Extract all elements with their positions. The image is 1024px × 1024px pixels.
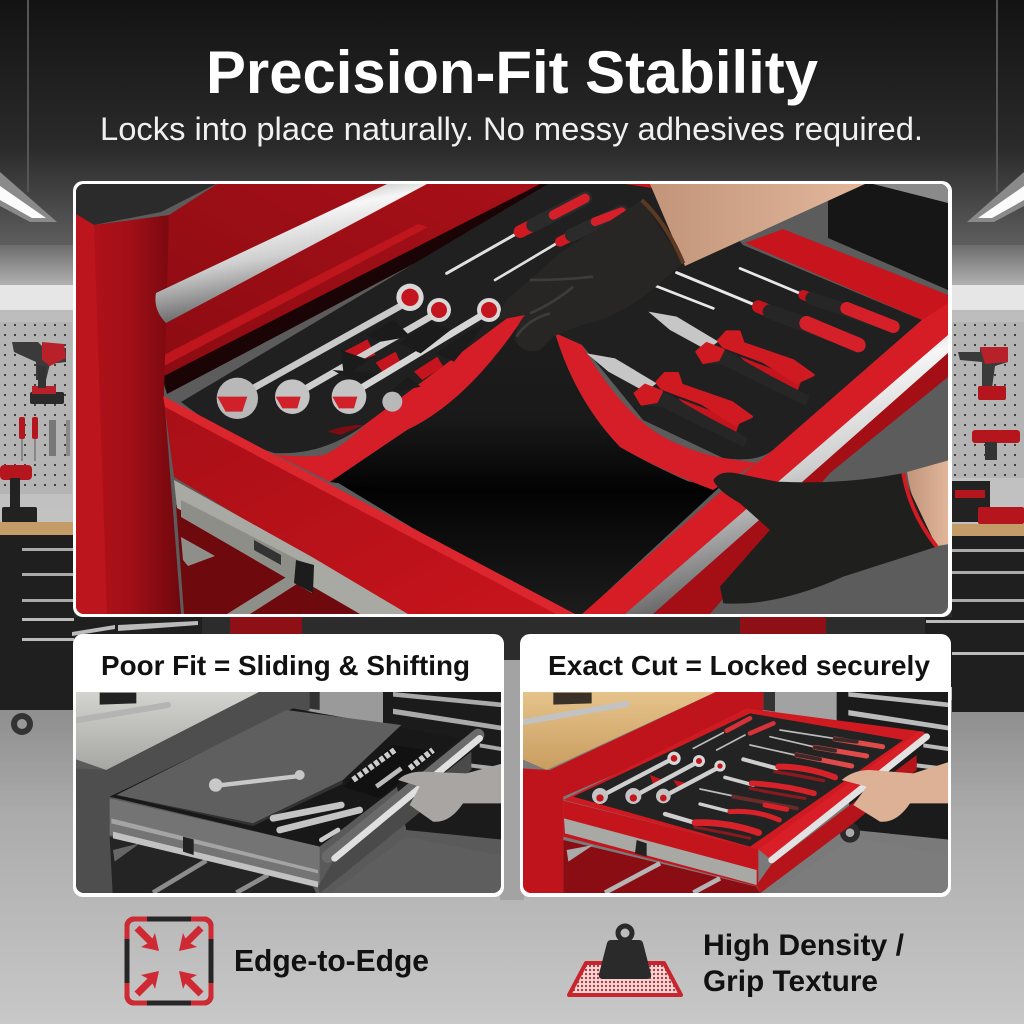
drawer floor: [330, 478, 725, 614]
label: high density grip texture: Grip Texture: [703, 965, 878, 998]
bench top: [520, 690, 720, 770]
screwdrivers by the wrist: [447, 198, 622, 280]
icon: hanging hand tools: [19, 417, 70, 461]
back red rim right: [745, 229, 948, 320]
floor: [767, 837, 953, 900]
loose tools: [273, 805, 360, 830]
drawer slide rail: [174, 480, 408, 614]
drawer rail: [757, 755, 917, 893]
upper forearm: [650, 184, 865, 266]
cabinet post: [76, 214, 181, 614]
ceiling lamp right: [967, 0, 1024, 222]
chrome rail: [625, 335, 948, 614]
drawer front face: [164, 402, 560, 614]
shadow gap under upper drawer: [162, 184, 565, 394]
screwdrivers: [693, 718, 883, 809]
upper drawer highlight: [160, 224, 428, 367]
red foam strap right: [555, 333, 757, 490]
back red rim top: [626, 184, 652, 188]
right screwdrivers: [653, 268, 893, 345]
title: Precision-Fit Stability: [206, 39, 819, 106]
tray rim: [563, 708, 923, 850]
drawer front: [110, 798, 320, 887]
pliers lower: [586, 353, 754, 432]
drawer rail: [318, 752, 471, 893]
bench top: [73, 690, 263, 770]
right workbench cabinet: [925, 524, 1024, 712]
wrenches: [592, 752, 726, 804]
lower forearm: [907, 460, 950, 546]
red foam strap left: [274, 311, 532, 482]
right pegboard with tools: [952, 322, 1024, 524]
black cabinet behind: [383, 690, 506, 840]
lower drawer rails: [181, 537, 300, 614]
pliers: [665, 759, 835, 838]
loose mat: [116, 710, 401, 823]
red rail underside: [653, 353, 948, 614]
hand: [398, 763, 503, 822]
heading: poor fit: Poor Fit = Sliding & Shifting: [101, 650, 470, 681]
label: edge-to-edge: Edge-to-Edge: [234, 943, 429, 978]
wall background: [308, 692, 383, 723]
pliers upper: [648, 312, 815, 390]
cabinet body: [73, 690, 310, 900]
left pegboard with tools: [0, 322, 72, 523]
wrench set: [217, 284, 501, 435]
black cabinet behind: [837, 690, 953, 840]
wrench: [216, 776, 300, 786]
upper drawer handle: [155, 184, 427, 323]
hand: [842, 762, 950, 822]
caster: [840, 823, 860, 843]
photo: fitted red drawer: [520, 690, 953, 900]
upper gloved hand: [499, 200, 683, 351]
foam: [573, 713, 903, 847]
heading: exact cut: Exact Cut = Locked securely: [548, 650, 930, 681]
icon: edge-to-edge: [127, 919, 211, 1003]
post lit side: [76, 214, 107, 614]
label: high density grip texture: [703, 929, 905, 998]
icon: lower drill: [0, 465, 37, 523]
subtitle: Locks into place naturally. No messy adhesives required.: [100, 111, 923, 147]
panel: poor fit: [73, 634, 506, 900]
icon: red power tool: [972, 430, 1020, 460]
foam tray: [181, 184, 922, 459]
lower drawers: [176, 505, 360, 614]
floor: [494, 886, 501, 893]
wall background: [763, 690, 840, 727]
red cabinet: [520, 690, 763, 900]
dark background cabinet: [828, 184, 948, 290]
right red rail: [582, 303, 948, 614]
left workbench cabinet: [0, 522, 202, 735]
lower dark: [110, 837, 320, 900]
slot in foam: [327, 425, 364, 435]
flipped foam flap: [330, 315, 689, 484]
socket tray: [343, 745, 436, 798]
icon: drill: [12, 342, 66, 404]
icon: weight on grip mat: [569, 926, 681, 995]
icon: drill: [958, 347, 1008, 400]
panel: main drawer photo: [73, 181, 952, 617]
tools in right foam: [447, 198, 893, 446]
ceiling lamp left: [0, 0, 57, 222]
label: high density grip texture: High Density /: [703, 929, 905, 962]
lower gloved hand: [713, 472, 937, 604]
panel: exact cut: [520, 634, 953, 900]
upper drawer face: [162, 184, 545, 380]
photo: loose grey mat: [73, 690, 506, 900]
drawer interior: [110, 708, 460, 847]
drawer front: [563, 801, 758, 887]
icon: toolbox: [952, 481, 1024, 524]
cabinet top mat: [76, 184, 216, 225]
drawer front lip: [163, 396, 575, 614]
